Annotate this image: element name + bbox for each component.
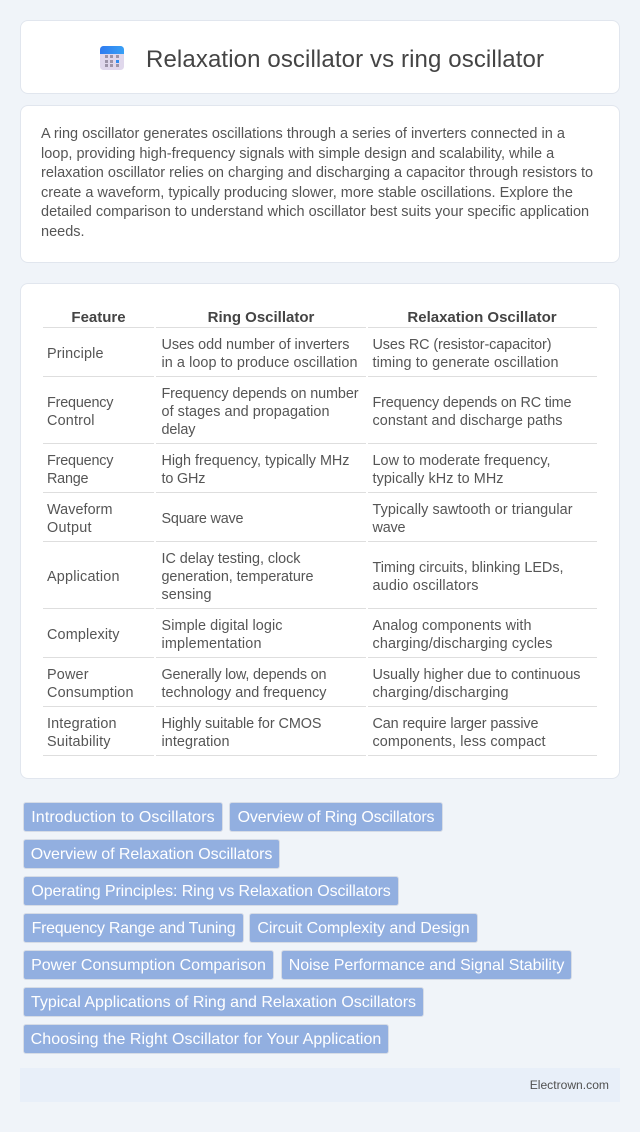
description text: create a waveform, typically producing slower, more stable oscillations. Explore the [41, 185, 573, 201]
tag: Choosing the Right Oscillator for Your Application [31, 1031, 381, 1048]
row: frequency range [47, 453, 550, 487]
row: complexity: charging/discharging cycles [372, 636, 552, 652]
row: waveform output [47, 502, 573, 536]
row: power consumption: Generally low, depends on [162, 667, 326, 683]
tag [23, 987, 424, 1017]
row: application [47, 551, 564, 603]
description text [41, 126, 593, 240]
row: complexity: Simple digital logic [162, 618, 282, 634]
row: integration suitability [47, 716, 546, 750]
tag [281, 950, 572, 980]
row: complexity: implementation [162, 636, 262, 652]
row: application: sensing [162, 587, 212, 603]
row: application: generation, temperature [162, 569, 314, 585]
row: frequency control: Frequency depends on RC time [372, 395, 572, 411]
tag: Power Consumption Comparison [31, 957, 266, 974]
tag [23, 1024, 389, 1054]
row: integration suitability: components, less compact [372, 734, 546, 750]
footer credit: Electrown.com [530, 1078, 609, 1092]
row: principle: Principle [47, 346, 104, 362]
footer [20, 1068, 620, 1102]
row: integration suitability: Highly suitable for CMOS [162, 716, 322, 732]
header card [20, 20, 620, 94]
description text: needs. [41, 224, 85, 240]
tag: Noise Performance and Signal Stability [289, 957, 564, 974]
row: power consumption: Usually higher due to continuous [372, 667, 580, 683]
tag [23, 913, 244, 943]
description text: loop, providing high-frequency signals with simple design and scalability, while a [41, 146, 554, 162]
row: application: audio oscillators [372, 578, 478, 594]
table header [71, 309, 557, 326]
description text: A ring oscillator generates oscillations through a series of inverters connected in a [41, 126, 565, 142]
tag: Overview of Relaxation Oscillators [31, 846, 272, 863]
row: power consumption: technology and frequency [162, 685, 327, 701]
tag [229, 802, 443, 832]
row: frequency control: of stages and propagation [162, 404, 330, 420]
row: waveform output: Output [47, 520, 92, 536]
row: frequency control [47, 386, 572, 438]
tag: Overview of Ring Oscillators [238, 809, 434, 826]
row: frequency control: delay [162, 422, 196, 438]
row: integration suitability: Integration [47, 716, 116, 732]
row: waveform output: Square wave [162, 511, 244, 527]
row: power consumption: Consumption [47, 685, 134, 701]
row: frequency control: constant and discharge paths [372, 413, 562, 429]
title: Relaxation oscillator vs ring oscillator [146, 46, 544, 73]
row: application: Application [47, 569, 120, 585]
table header: Relaxation Oscillator [407, 309, 557, 326]
row: power consumption: charging/discharging [372, 685, 508, 701]
row: waveform output: Typically sawtooth or triangular [372, 502, 573, 518]
row: principle: in a loop to produce oscillation [162, 355, 358, 371]
row: power consumption: Power [47, 667, 89, 683]
row: waveform output: wave [372, 520, 406, 536]
comparison table [43, 309, 597, 756]
row: frequency control: Frequency depends on number [162, 386, 359, 402]
row: waveform output: Waveform [47, 502, 112, 518]
row: principle [47, 337, 558, 371]
row: frequency control: Control [47, 413, 94, 429]
row: power consumption [47, 667, 580, 701]
row: integration suitability: Suitability [47, 734, 111, 750]
row: application: Timing circuits, blinking LEDs, [372, 560, 564, 576]
row: frequency range: Frequency [47, 453, 114, 469]
row: frequency range: High frequency, typically MHz [162, 453, 350, 469]
table header: Feature [71, 309, 126, 326]
tag [23, 802, 223, 832]
tag [23, 839, 280, 869]
row: principle: timing to generate oscillation [372, 355, 558, 371]
row: complexity [47, 618, 552, 652]
description text: detailed comparison to understand which oscillator best suits your specific application [41, 204, 589, 220]
tag [23, 950, 274, 980]
row: complexity: Complexity [47, 627, 120, 643]
row: frequency range: Range [47, 471, 88, 487]
row: integration suitability: integration [162, 734, 230, 750]
description card [20, 105, 620, 263]
tag [249, 913, 478, 943]
row: application: IC delay testing, clock [162, 551, 301, 567]
table header: Ring Oscillator [208, 309, 315, 326]
row: principle: Uses RC (resistor-capacitor) [372, 337, 552, 353]
row: frequency control: Frequency [47, 395, 114, 411]
comparison table card [20, 283, 620, 779]
icon: calendar [100, 46, 124, 70]
tag: Frequency Range and Tuning [32, 920, 235, 937]
row: integration suitability: Can require larger passive [372, 716, 538, 732]
description text: relaxation oscillator relies on charging and discharging a capacitor through resistors to [41, 165, 593, 181]
row: complexity: Analog components with [372, 618, 532, 634]
row: principle: Uses odd number of inverters [162, 337, 350, 353]
topic tags [23, 802, 572, 1054]
tag: Typical Applications of Ring and Relaxation Oscillators [31, 994, 416, 1011]
row: frequency range: typically kHz to MHz [372, 471, 504, 487]
row: frequency range: to GHz [162, 471, 206, 487]
tag [23, 876, 399, 906]
row: frequency range: Low to moderate frequency, [372, 453, 550, 469]
tag: Introduction to Oscillators [31, 809, 215, 826]
tag: Circuit Complexity and Design [257, 920, 470, 937]
tag: Operating Principles: Ring vs Relaxation Oscillators [31, 883, 391, 900]
